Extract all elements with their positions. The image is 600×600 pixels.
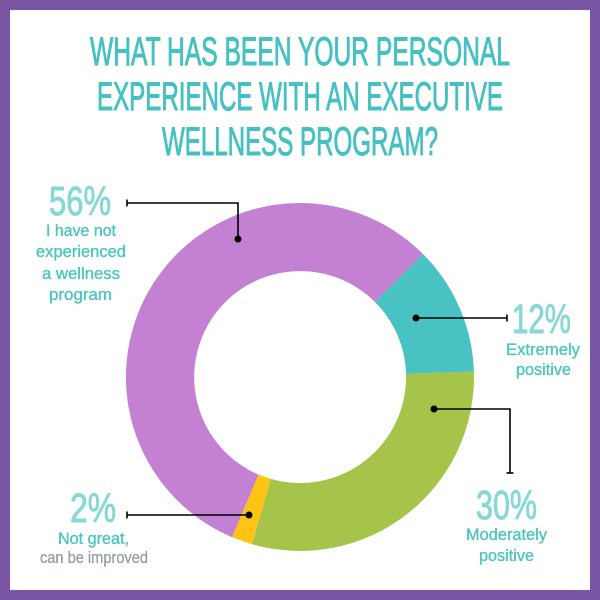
segment: 30% moderately positive [252, 372, 474, 551]
title [90, 30, 510, 164]
leader line: 56% [127, 200, 242, 242]
segment: 2% not great [232, 475, 271, 544]
label: 56% [36, 178, 126, 304]
label: 56%: I have not [46, 222, 116, 240]
label: 56%: 56% [49, 178, 111, 224]
label: 30%: positive [479, 547, 534, 565]
leader line: 12% [412, 314, 507, 322]
segment: 12% extremely positive [375, 254, 474, 374]
label: 30%: 30% [476, 482, 537, 528]
leader line: 2% [127, 512, 252, 518]
label: 56%: a wellness [42, 265, 120, 283]
label: 12% [506, 296, 581, 379]
label: 2% [40, 485, 148, 567]
label: 56%: experienced [36, 243, 126, 261]
label: 12%: Extremely [506, 341, 581, 359]
label: 30%: Moderately [466, 526, 548, 544]
label: 30% [466, 482, 548, 565]
label: 12%: 12% [512, 296, 571, 342]
label: 2%: can be improved [40, 549, 148, 567]
donut chart [126, 203, 474, 551]
segment: 56% not experienced [126, 203, 423, 537]
label: 12%: positive [516, 361, 571, 379]
leader line: 30% [430, 406, 514, 473]
label: 2%: 2% [70, 485, 116, 531]
label: 2%: Not great, [58, 530, 129, 548]
label: 56%: program [49, 286, 112, 304]
